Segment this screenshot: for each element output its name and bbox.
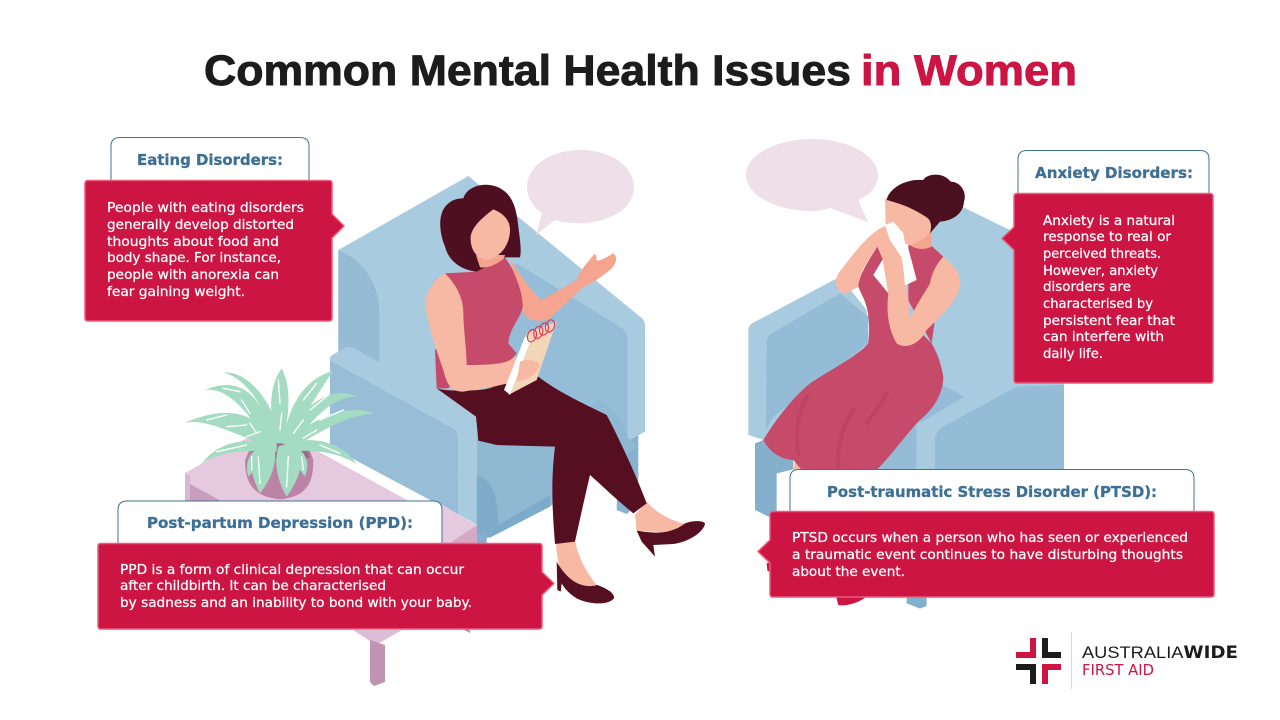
trousers xyxy=(437,377,647,544)
far leg shoe and foot xyxy=(635,502,685,533)
heading tab xyxy=(1018,150,1209,194)
illustration: woman with tissue xyxy=(763,175,965,605)
illustration: right armchair xyxy=(748,204,1064,609)
callout box xyxy=(85,180,344,321)
hair xyxy=(887,175,965,233)
illustration: left armchair xyxy=(330,176,645,545)
face xyxy=(471,209,510,260)
title: Common Mental Health Issues xyxy=(204,47,851,95)
tissue xyxy=(873,222,917,293)
callout box xyxy=(1002,194,1213,383)
callout box xyxy=(98,544,554,629)
face xyxy=(885,198,932,245)
logo tagline: FIRST AID xyxy=(1082,661,1154,679)
heading text: Anxiety Disorders: xyxy=(1035,164,1193,182)
panel: anxiety disorders xyxy=(1002,150,1213,383)
body text xyxy=(792,531,1188,580)
body text: persistent fear that xyxy=(1043,314,1175,329)
body text: response to real or xyxy=(1043,230,1171,245)
heading text: Post-traumatic Stress Disorder (PTSD): xyxy=(827,483,1157,501)
body text: daily life. xyxy=(1043,347,1103,362)
illustration: table front corner over chair xyxy=(438,502,477,543)
body text: However, anxiety xyxy=(1043,264,1158,279)
callout box xyxy=(758,512,1214,597)
hair xyxy=(440,185,521,272)
body text: disorders are xyxy=(1043,280,1131,295)
red shoes xyxy=(767,562,772,573)
body text: Anxiety is a natural xyxy=(1043,214,1175,229)
heading tab xyxy=(111,138,309,181)
body text: about the event. xyxy=(792,565,905,580)
logo wordmark: AUSTRALIA WIDE xyxy=(1082,643,1238,662)
body text: perceived threats. xyxy=(1043,247,1161,262)
illustration: potted plant xyxy=(183,368,374,499)
body text: after childbirth. It can be characterised xyxy=(120,579,386,594)
heading tab xyxy=(118,501,442,544)
lower leg xyxy=(793,460,803,470)
illustration: right speech bubble xyxy=(746,139,878,222)
panel: post-traumatic stress disorder xyxy=(758,470,1214,597)
illustration: left speech bubble xyxy=(527,150,634,235)
illustration: side table xyxy=(185,425,480,686)
body text: thoughts about food and xyxy=(107,235,279,250)
near arm xyxy=(425,273,540,392)
body text: a traumatic event continues to have disturbing thoughts xyxy=(792,548,1183,563)
top xyxy=(435,257,523,388)
body text: can interfere with xyxy=(1043,330,1164,345)
neck xyxy=(908,232,932,249)
arms xyxy=(836,226,960,346)
body text: PTSD occurs when a person who has seen or experienced xyxy=(792,531,1188,546)
neck xyxy=(476,255,505,268)
body text: characterised by xyxy=(1043,297,1153,312)
heading tab xyxy=(790,470,1194,512)
panel: post-partum depression xyxy=(98,501,554,629)
body text: people with anorexia can xyxy=(107,268,279,283)
body text xyxy=(120,563,472,611)
body text: body shape. For instance, xyxy=(107,251,281,266)
body text: fear gaining weight. xyxy=(107,285,245,300)
body text: People with eating disorders xyxy=(107,201,304,216)
logo mark xyxy=(1016,638,1061,684)
notebook xyxy=(508,322,557,395)
dress xyxy=(763,245,943,470)
body text xyxy=(107,201,304,300)
panel: eating disorders xyxy=(85,138,344,321)
heading text: Eating Disorders: xyxy=(137,151,283,169)
illustration: woman with notebook xyxy=(425,185,705,603)
body text: generally develop distorted xyxy=(107,218,294,233)
body text: PPD is a form of clinical depression that can occur xyxy=(120,563,465,578)
near leg foot and shoe xyxy=(556,540,597,590)
body text: by sadness and an inability to bond with your baby. xyxy=(120,596,472,611)
logo: Australia Wide First Aid xyxy=(1016,632,1238,689)
heading text: Post-partum Depression (PPD): xyxy=(147,514,413,532)
body text xyxy=(1043,214,1175,362)
raised arm xyxy=(510,253,616,321)
title: in Women xyxy=(861,47,1077,95)
